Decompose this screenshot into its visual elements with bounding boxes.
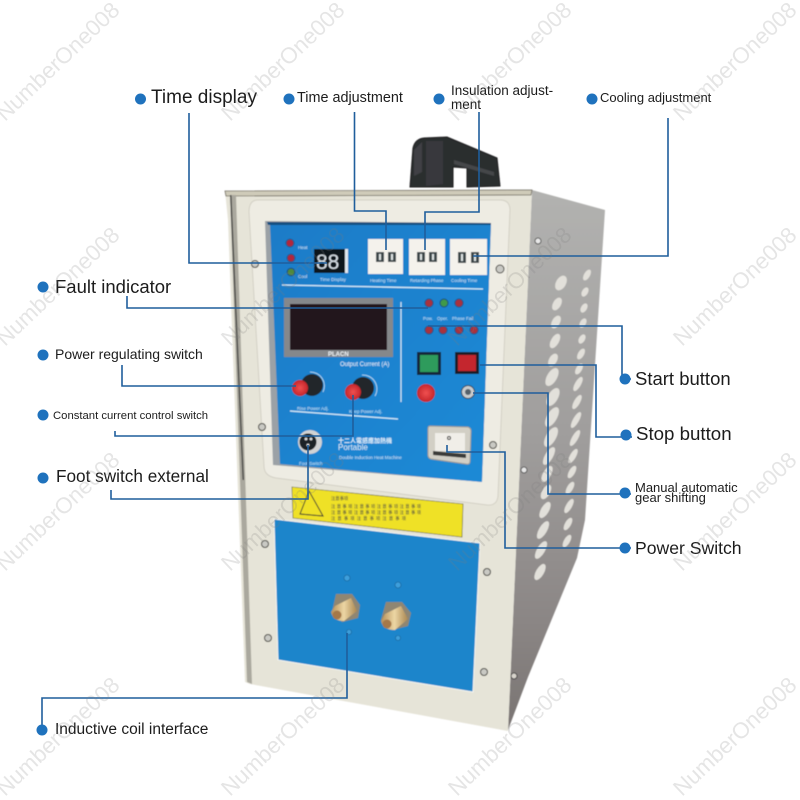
warning label [292,487,463,537]
watermarks: NumberOne008 [668,222,800,351]
icon: carrying handle [410,137,500,187]
label: Manual automatic gear shifting [620,480,738,505]
product name: 十二人電感應加熱機 [338,437,392,445]
label: Power Switch: Power Switch [635,538,742,558]
watermarks: NumberOne008 [216,672,350,800]
label: Start button: Start button [635,368,731,389]
icon: coil connector left [331,594,360,622]
watermarks: NumberOne008 [443,0,577,126]
indicator lights: time section: Cool [298,274,307,279]
label: Manual automatic gear shifting: gear shifting [635,490,706,505]
label: Constant current control switch: Constant current control switch [53,410,208,422]
label: Foot switch external: Foot switch external [56,466,209,486]
indicator lights: time section: Heat [298,245,308,250]
warning label: 注意事项注意事项注意事项注意事项 [331,503,422,510]
watermarks: NumberOne008 [668,672,800,800]
label: Time display: Time display [151,87,257,108]
watermarks: NumberOne008 [216,447,350,576]
panel bolts [344,575,401,640]
power and rise knobs: Keep Power Adj. [349,409,382,414]
watermarks: NumberOne008 [443,222,577,351]
foot switch socket: Foot Switch [299,461,323,466]
label: Manual automatic gear shifting: Manual automatic [635,480,738,495]
label: Insulation adjustment: Insulation adjust- [451,83,553,98]
watermarks: NumberOne008 [443,447,577,576]
output current meter: PLACN [328,352,349,358]
inner rounded frame [249,200,510,505]
panel: lower blue coil panel [274,519,480,692]
front face [225,190,532,731]
stop button [455,352,479,374]
power and rise knobs: Rise Power Adj. [297,406,329,411]
product name [338,437,402,460]
label: Cooling adjustment: Cooling adjustment [600,90,712,105]
output current meter [284,298,393,368]
timer modules: Cooling Time [451,278,478,283]
label: Time adjustment: Time adjustment [297,90,403,106]
label: Fault indicator: Fault indicator [55,276,171,297]
label: Power regulating switch: Power regulating switch [55,346,203,362]
product name: Portable [338,443,368,452]
panel: blue control panel [265,221,491,482]
label: Stop button: Stop button [636,423,732,444]
output current meter: Output Current (A) [340,362,389,368]
timer modules: Heating Time [370,278,397,283]
timer modules: Retarding Phase [410,278,444,283]
indicator lights: time section [286,239,308,279]
side panel with vents [508,190,605,730]
time display digits: Time Display [320,277,347,282]
watermarks: NumberOne008 [216,222,350,351]
manual automatic switch [417,384,474,402]
label: Insulation adjustment: ment [451,97,481,112]
time display digits [314,249,348,282]
power rocker switch [428,426,471,464]
warning label: 注意事项 [331,495,349,502]
machine: induction heater cabinet [225,190,605,731]
watermarks: NumberOne008 [216,0,350,126]
foot switch socket [298,430,323,466]
label: Inductive coil interface: Inductive coil interface [55,721,208,738]
warning label: 注意事项注意事项注意事项 [331,515,407,522]
watermarks: NumberOne008 [668,447,800,576]
warning label: 注意事项注意事项注意事项注意事项 [331,509,422,516]
timer modules [368,239,487,283]
fault lights: Phase Fail [452,316,473,321]
fault lights [423,299,478,334]
icon: coil connector right [381,602,411,630]
time display digits: 88 [316,251,339,274]
product name: Double Induction Heat Machine [339,455,402,460]
fault lights: Pow. [423,316,433,321]
fault lights: Oper. [437,316,448,321]
start button [417,352,441,375]
watermarks: NumberOne008 [443,672,577,800]
leader lines [42,112,668,725]
label: Insulation adjustment [434,83,553,112]
power and rise knobs [292,372,382,414]
screws [252,260,504,676]
